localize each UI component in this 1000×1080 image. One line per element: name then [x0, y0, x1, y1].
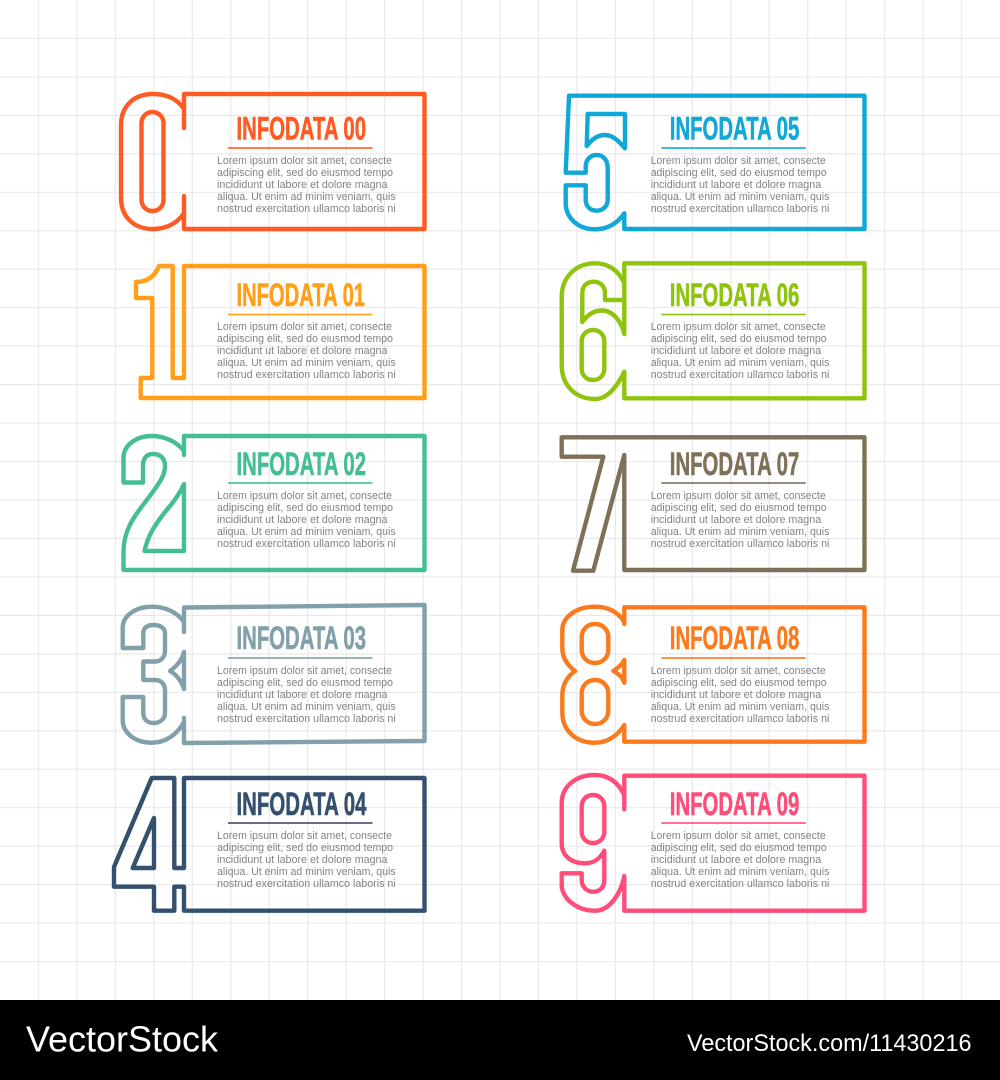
text block: adipiscing elit, sed do eiusmod tempo [217, 167, 393, 179]
text block: adipiscing elit, sed do eiusmod tempo [651, 842, 827, 854]
text block: nostrud exercitation ullamco laboris ni [651, 369, 829, 381]
heading: INFODATA 06 [670, 277, 799, 313]
text block [651, 490, 830, 550]
text block: Lorem ipsum dolor sit amet, consecte [651, 155, 826, 167]
text block: incididunt ut labore et dolore magna [217, 854, 388, 866]
text block: aliqua. Ut enim ad minim veniam, quis [651, 526, 830, 538]
text block [651, 155, 830, 215]
heading: INFODATA 05 [670, 110, 799, 146]
panel: infodata 07 [562, 437, 864, 571]
text block: nostrud exercitation ullamco laboris ni [651, 878, 829, 890]
text block [217, 321, 396, 381]
text block: nostrud exercitation ullamco laboris ni [651, 538, 829, 550]
text block: nostrud exercitation ullamco laboris ni [217, 878, 396, 890]
text block: aliqua. Ut enim ad minim veniam, quis [217, 526, 396, 538]
panel: infodata 04 [114, 778, 424, 911]
text block [651, 665, 830, 725]
footer url text: VectorStock.com/11430216 [687, 1030, 972, 1057]
text block: aliqua. Ut enim ad minim veniam, quis [217, 357, 396, 369]
panel: infodata 03 [123, 605, 424, 743]
text block: Lorem ipsum dolor sit amet, consecte [651, 665, 826, 677]
text block: adipiscing elit, sed do eiusmod tempo [217, 502, 393, 514]
icon: digit 0 frame [121, 94, 424, 229]
heading: INFODATA 02 [236, 446, 366, 482]
text block [651, 321, 830, 381]
text block: Lorem ipsum dolor sit amet, consecte [217, 830, 392, 842]
underline [661, 822, 806, 824]
text block: nostrud exercitation ullamco laboris ni [217, 538, 396, 550]
footer bar [0, 1000, 1000, 1080]
icon: digit 6 frame [562, 263, 864, 399]
heading: INFODATA 01 [236, 277, 365, 313]
text block [651, 830, 830, 890]
text block: incididunt ut labore et dolore magna [651, 179, 822, 191]
text block: adipiscing elit, sed do eiusmod tempo [651, 333, 827, 345]
text block: aliqua. Ut enim ad minim veniam, quis [651, 701, 830, 713]
heading: INFODATA 04 [236, 786, 367, 822]
heading: INFODATA 07 [670, 446, 799, 482]
text block: nostrud exercitation ullamco laboris ni [217, 203, 396, 215]
text block: nostrud exercitation ullamco laboris ni [651, 713, 829, 725]
underline [228, 314, 372, 315]
panel: infodata 00 [121, 94, 424, 229]
text block: incididunt ut labore et dolore magna [651, 345, 822, 357]
heading: INFODATA 08 [670, 620, 799, 656]
icon: digit 3 frame [123, 605, 424, 743]
text block: incididunt ut labore et dolore magna [217, 345, 388, 357]
text block: incididunt ut labore et dolore magna [651, 854, 822, 866]
panel: infodata 02 [124, 436, 424, 570]
text block: Lorem ipsum dolor sit amet, consecte [217, 155, 392, 167]
icon: digit 2 frame [124, 436, 424, 570]
icon: digit 4 frame [114, 778, 424, 911]
panel: infodata 06 [562, 263, 864, 399]
text block: Lorem ipsum dolor sit amet, consecte [651, 490, 826, 502]
underline [228, 822, 372, 824]
text block: nostrud exercitation ullamco laboris ni [217, 713, 396, 725]
text block: incididunt ut labore et dolore magna [651, 689, 822, 701]
icon: digit 8 frame [562, 607, 864, 743]
footer logo text: VectorStock [26, 1018, 219, 1060]
text block: aliqua. Ut enim ad minim veniam, quis [651, 866, 830, 878]
text block: nostrud exercitation ullamco laboris ni [651, 203, 829, 215]
text block: incididunt ut labore et dolore magna [217, 179, 388, 191]
panel: infodata 08 [562, 607, 864, 743]
icon: digit 5 frame [566, 96, 864, 229]
text block: Lorem ipsum dolor sit amet, consecte [217, 665, 392, 677]
panel: infodata 01 [136, 266, 424, 398]
text block: incididunt ut labore et dolore magna [217, 514, 388, 526]
panel: infodata 09 [562, 775, 864, 911]
text block: incididunt ut labore et dolore magna [651, 514, 822, 526]
underline [661, 314, 806, 315]
underline [228, 147, 372, 149]
text block: adipiscing elit, sed do eiusmod tempo [217, 842, 393, 854]
text block [217, 830, 396, 890]
text block: nostrud exercitation ullamco laboris ni [217, 369, 396, 381]
text block: aliqua. Ut enim ad minim veniam, quis [217, 866, 396, 878]
text block [217, 490, 396, 550]
text block: Lorem ipsum dolor sit amet, consecte [651, 830, 826, 842]
text block: aliqua. Ut enim ad minim veniam, quis [217, 701, 396, 713]
text block [217, 155, 396, 215]
underline [228, 482, 372, 484]
text block: aliqua. Ut enim ad minim veniam, quis [651, 191, 830, 203]
text block: adipiscing elit, sed do eiusmod tempo [217, 677, 393, 689]
text block: incididunt ut labore et dolore magna [217, 689, 388, 701]
icon: digit 9 frame [562, 775, 864, 911]
underline [228, 657, 372, 659]
text block: aliqua. Ut enim ad minim veniam, quis [651, 357, 830, 369]
text block: Lorem ipsum dolor sit amet, consecte [217, 490, 392, 502]
text block: Lorem ipsum dolor sit amet, consecte [217, 321, 392, 333]
text block: adipiscing elit, sed do eiusmod tempo [651, 502, 827, 514]
text block [217, 665, 396, 725]
panel: infodata 05 [566, 96, 864, 229]
text block: adipiscing elit, sed do eiusmod tempo [217, 333, 393, 345]
underline [661, 657, 806, 659]
underline [661, 482, 806, 484]
icon: digit 7 frame [562, 437, 864, 571]
icon: digit 1 frame [136, 266, 424, 398]
text block: adipiscing elit, sed do eiusmod tempo [651, 167, 827, 179]
underline [661, 147, 806, 149]
heading: INFODATA 00 [236, 110, 366, 146]
text block: Lorem ipsum dolor sit amet, consecte [651, 321, 826, 333]
text block: aliqua. Ut enim ad minim veniam, quis [217, 191, 396, 203]
text block: adipiscing elit, sed do eiusmod tempo [651, 677, 827, 689]
heading: INFODATA 03 [236, 620, 366, 656]
heading: INFODATA 09 [670, 786, 799, 822]
